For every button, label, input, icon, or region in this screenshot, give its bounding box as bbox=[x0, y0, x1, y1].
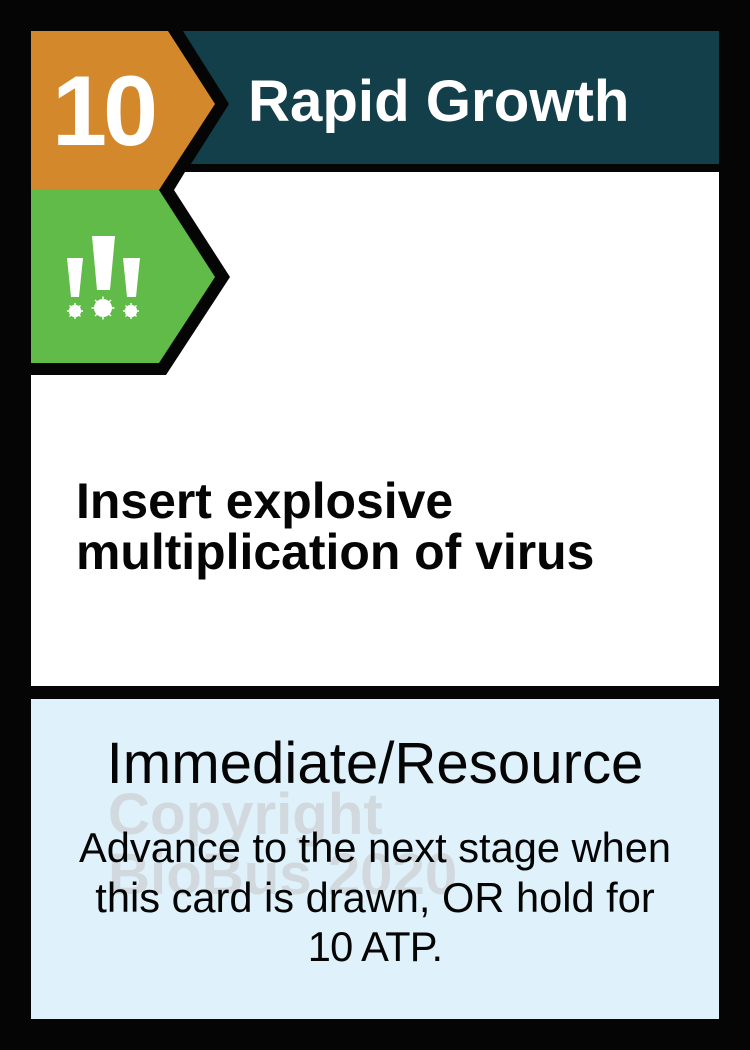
orange pentagon bbox=[31, 31, 215, 190]
title: Rapid Growth bbox=[248, 69, 629, 134]
card category heading: Immediate/Resource bbox=[107, 731, 643, 796]
panel: effect description bbox=[31, 699, 719, 1019]
watermark: BioBus 2020 bbox=[108, 842, 457, 907]
badge: card type bbox=[31, 190, 215, 363]
panel: title banner bbox=[183, 31, 719, 164]
panel background bbox=[31, 699, 719, 1019]
body text: multiplication of virus bbox=[76, 524, 594, 580]
green pentagon bbox=[31, 190, 215, 363]
badge: card number bbox=[31, 31, 215, 190]
body text: Insert explosive bbox=[76, 473, 453, 529]
panel: main white body bbox=[31, 172, 719, 686]
watermark: Copyright bbox=[108, 782, 383, 847]
effect text: this card is drawn, OR hold for bbox=[95, 874, 655, 921]
effect text: 10 ATP. bbox=[308, 923, 442, 970]
effect text: Advance to the next stage when bbox=[79, 824, 671, 871]
banner background bbox=[183, 31, 719, 164]
icon: exclamation marks with virus dots bbox=[67, 236, 140, 320]
number: 10 bbox=[52, 55, 154, 166]
